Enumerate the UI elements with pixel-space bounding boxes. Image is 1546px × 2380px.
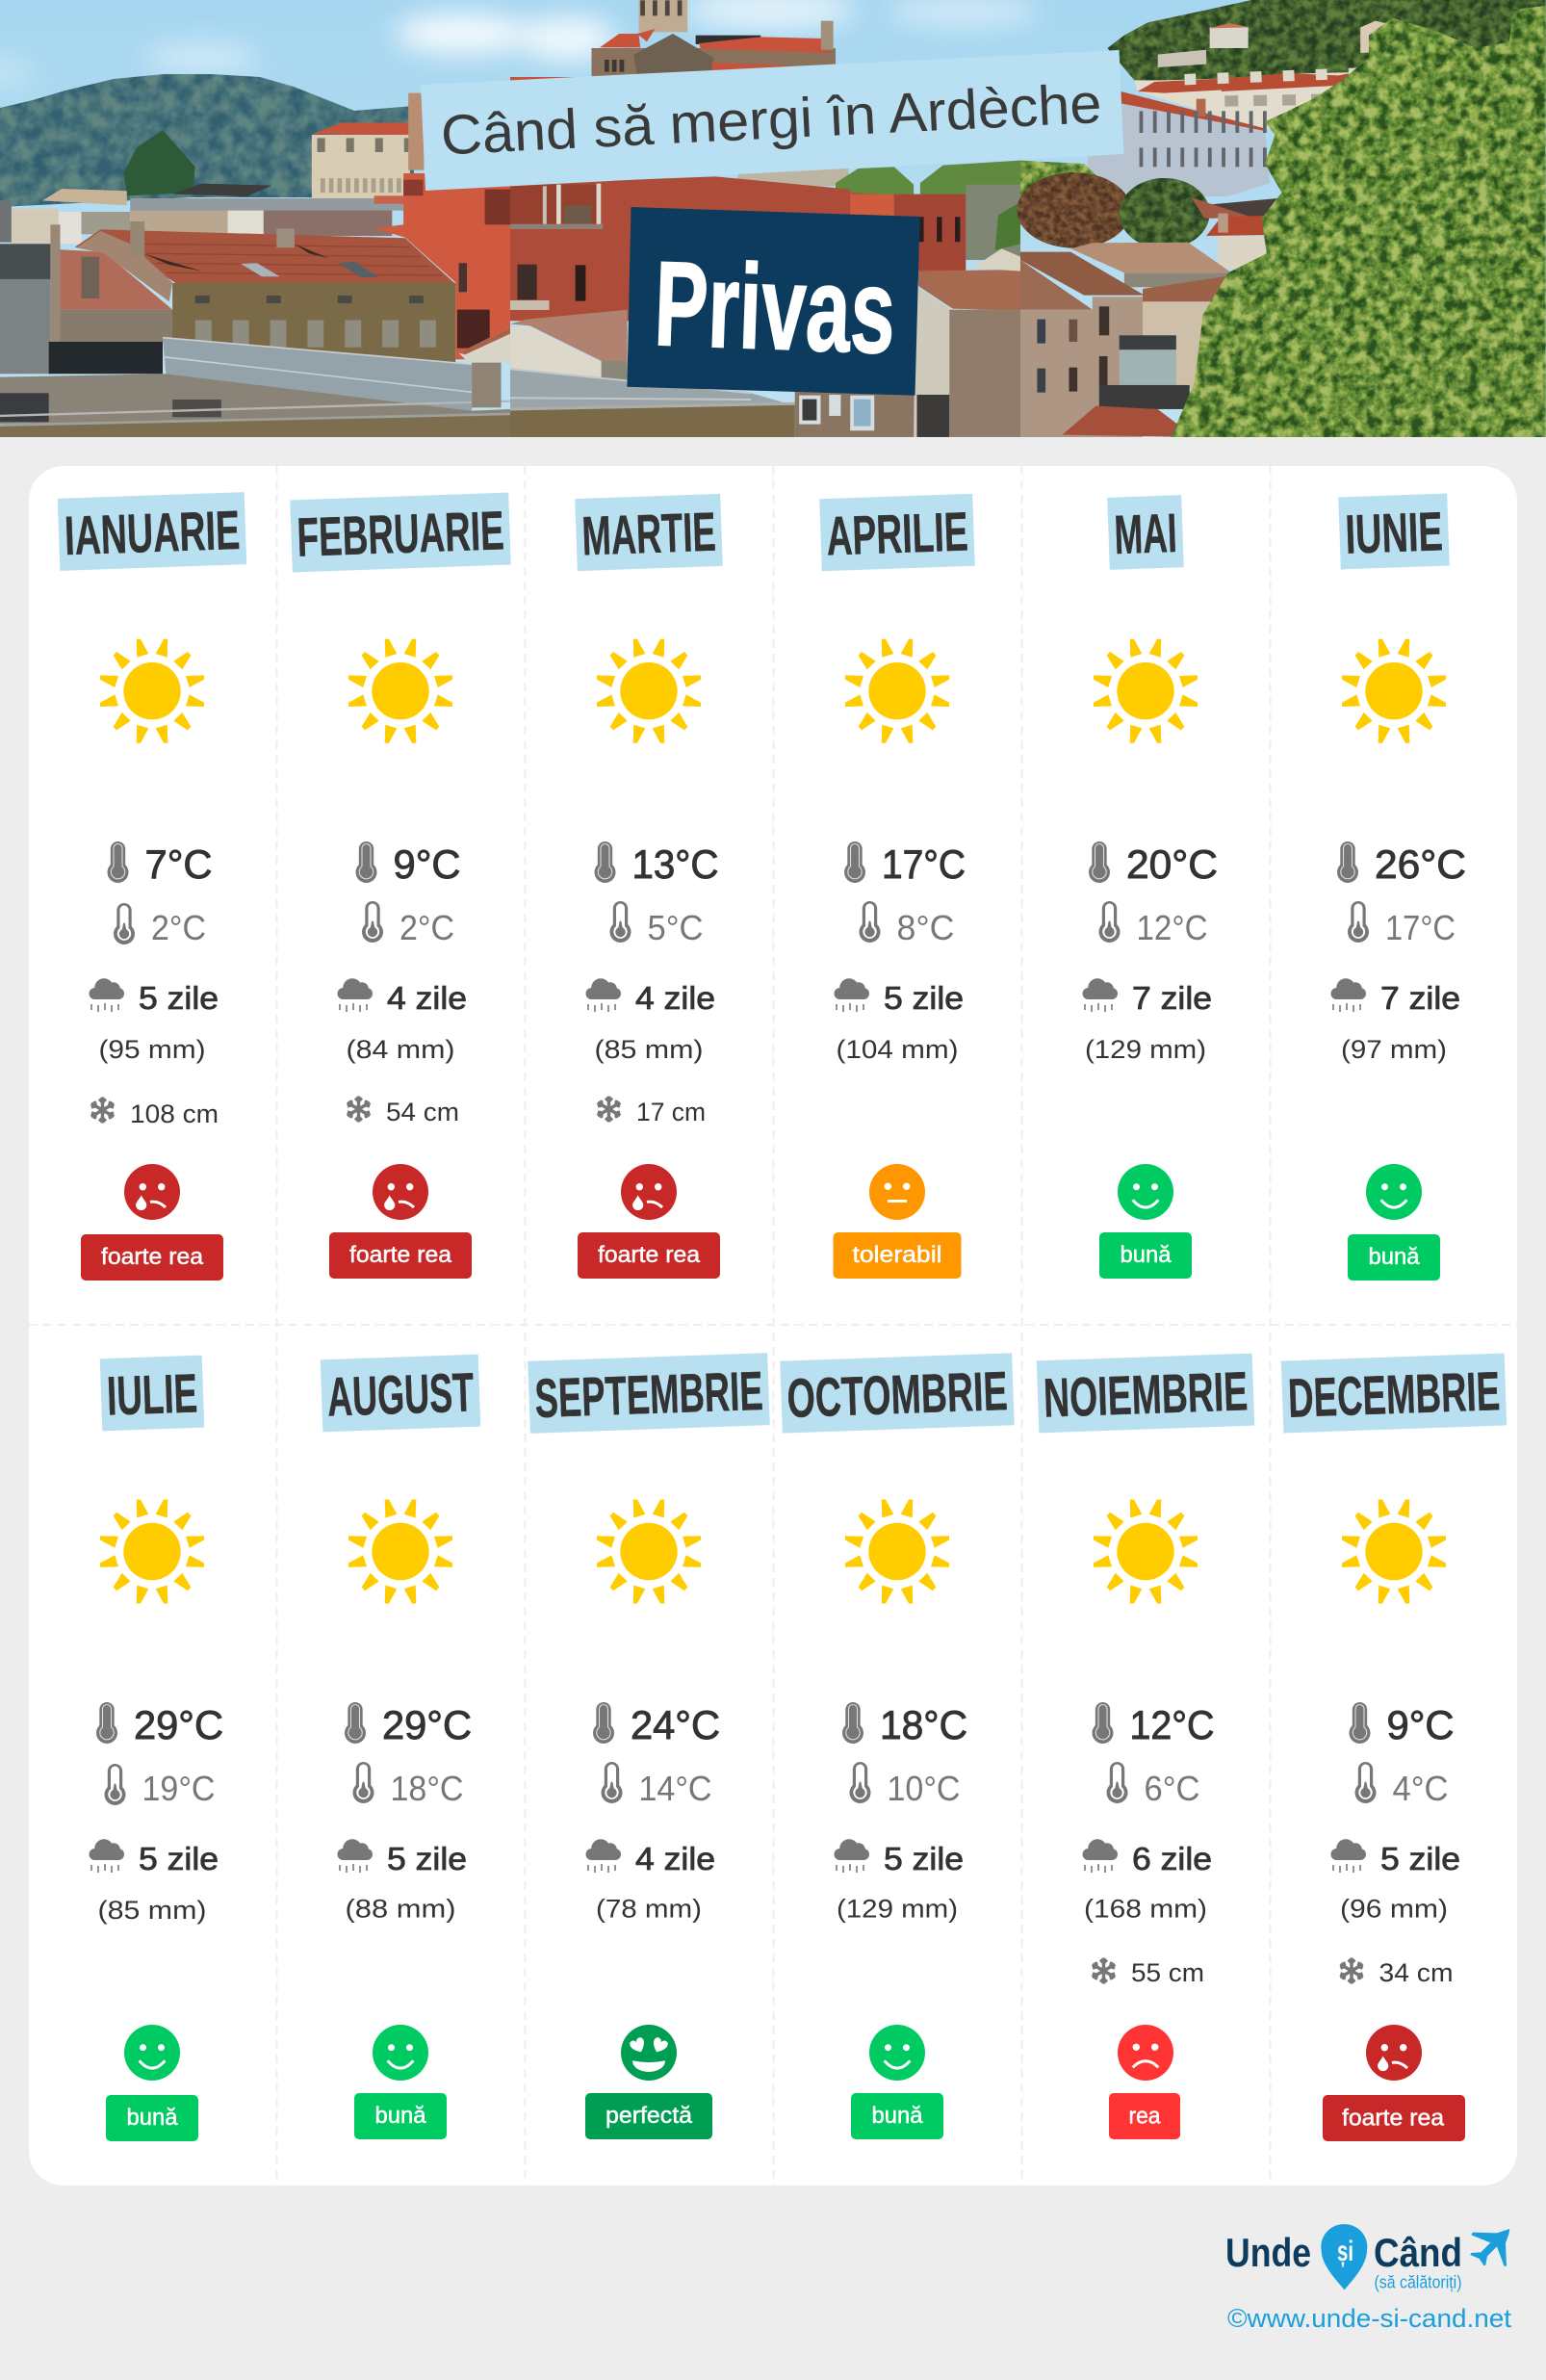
big chestnut tree: [1172, 6, 1546, 437]
min temperature: 2°C: [399, 908, 454, 947]
month heading: [58, 492, 246, 571]
logo: Unde și Când: [1225, 2224, 1509, 2292]
rating badge: [585, 2093, 712, 2139]
max temperature: [108, 841, 212, 887]
min temperature: [601, 1762, 712, 1808]
max temperature: 9°C: [393, 841, 460, 887]
rating badge: bună: [1121, 1242, 1172, 1268]
rainfall: (85 mm): [98, 1896, 206, 1925]
left district buildings: [0, 93, 510, 437]
month heading: [528, 1353, 770, 1434]
min temperature: 19°C: [142, 1769, 216, 1808]
icon: sun: [100, 1500, 204, 1604]
min temperature: 10°C: [888, 1769, 961, 1808]
min temperature: 4°C: [1392, 1769, 1448, 1808]
panel: Mai: [1082, 495, 1218, 1279]
rainy days: 4 zile: [387, 980, 467, 1016]
icon: crying face: [1366, 2025, 1422, 2081]
rating badge: [578, 1232, 720, 1279]
icon: crying face: [621, 1164, 677, 1220]
icon: sun: [597, 639, 701, 743]
month heading: [819, 494, 975, 571]
rating badge: foarte rea: [349, 1242, 452, 1268]
panel: Noiembrie: [1037, 1354, 1254, 2139]
church and central red building: [510, 0, 1020, 437]
max temperature: 17°C: [882, 841, 966, 887]
rating badge: tolerabil: [853, 1242, 941, 1268]
rainy days: [1330, 1839, 1460, 1876]
month heading: AUGUST: [326, 1361, 475, 1429]
min temperature: [1107, 1762, 1199, 1808]
snowfall: 34 cm: [1379, 1958, 1454, 1987]
max temperature: 20°C: [1126, 841, 1218, 887]
month heading: [321, 1355, 480, 1432]
logo: Unde și Când: (să călătoriți): [1375, 2273, 1461, 2292]
icon: sun: [845, 639, 949, 743]
min temperature: [362, 901, 454, 947]
icon: sun: [100, 639, 204, 743]
icon: sad face: [1118, 2025, 1173, 2081]
min temperature: 5°C: [647, 908, 703, 947]
rainy days: 4 zile: [635, 1841, 715, 1876]
rainy days: [1330, 978, 1460, 1016]
min temperature: [352, 1762, 464, 1808]
icon: sun: [1094, 639, 1198, 743]
icon: smiling face: [1118, 1164, 1173, 1220]
month heading: MAI: [1113, 503, 1178, 566]
rainy days: [834, 978, 964, 1016]
month heading: [575, 494, 723, 571]
panel: Martie: [575, 494, 723, 1279]
rating badge: foarte rea: [598, 1242, 701, 1268]
max temperature: 7°C: [144, 841, 212, 887]
max temperature: [842, 1702, 967, 1747]
month heading: [1338, 494, 1450, 569]
title banner: Când să mergi în Ardèche: [439, 72, 1103, 167]
rainy days: [1082, 1839, 1212, 1876]
rainy days: [585, 978, 715, 1016]
min temperature: [104, 1764, 216, 1808]
rainy days: 7 zile: [1380, 980, 1460, 1016]
rainfall: (96 mm): [1340, 1895, 1448, 1924]
panel: August: [321, 1355, 480, 2139]
min temperature: 12°C: [1136, 908, 1207, 947]
snowfall: [598, 1096, 706, 1126]
rating badge: [81, 1234, 223, 1281]
icon: plane: [1470, 2229, 1509, 2266]
min temperature: 6°C: [1144, 1769, 1199, 1808]
rating badge: [1323, 2095, 1465, 2141]
min temperature: [849, 1762, 961, 1808]
min temperature: [114, 903, 206, 947]
rainy days: [834, 1839, 964, 1876]
icon: crying face: [124, 1164, 180, 1220]
min temperature: [610, 901, 703, 947]
rainy days: 5 zile: [884, 980, 964, 1016]
panel: Aprilie: [819, 494, 975, 1279]
rainy days: 5 zile: [884, 1841, 964, 1876]
snowfall: 54 cm: [386, 1098, 459, 1126]
rating badge: bună: [1369, 1244, 1420, 1270]
max temperature: 24°C: [631, 1702, 720, 1747]
rainy days: 4 zile: [635, 980, 715, 1016]
rainy days: [89, 1839, 219, 1876]
max temperature: 12°C: [1130, 1702, 1215, 1747]
month heading: APRILIE: [825, 501, 969, 568]
min temperature: 14°C: [639, 1769, 712, 1808]
rainfall: (129 mm): [837, 1895, 958, 1924]
rating badge: bună: [127, 2105, 178, 2131]
rating badge: [329, 1232, 472, 1279]
month heading: OCTOMBRIE: [786, 1360, 1009, 1430]
rating badge: foarte rea: [101, 1244, 204, 1270]
month heading: IULIE: [106, 1362, 198, 1428]
icon: sun: [597, 1500, 701, 1604]
rainfall: (129 mm): [1085, 1035, 1206, 1064]
rainfall: (85 mm): [595, 1035, 703, 1064]
max temperature: [1092, 1702, 1215, 1747]
max temperature: [595, 841, 718, 887]
min temperature: 8°C: [897, 908, 955, 947]
rating badge: [851, 2093, 943, 2139]
icon: neutral face: [869, 1164, 925, 1220]
rainfall: (104 mm): [836, 1035, 959, 1064]
icon: sun: [348, 1500, 452, 1604]
max temperature: [356, 841, 460, 887]
title banner: [421, 50, 1124, 191]
rainy days: [89, 978, 219, 1016]
rainfall: (84 mm): [347, 1035, 454, 1064]
panel: Iulie: [89, 1356, 223, 2141]
city name banner: [627, 207, 920, 396]
logo: Unde și Când: Când: [1374, 2230, 1462, 2275]
rating badge: [834, 1232, 961, 1279]
rating badge: [1109, 2093, 1180, 2139]
rainy days: 5 zile: [1380, 1841, 1460, 1876]
max temperature: 13°C: [631, 841, 718, 887]
month heading: [100, 1356, 204, 1431]
rainfall: (168 mm): [1084, 1895, 1207, 1924]
max temperature: 29°C: [134, 1702, 223, 1747]
snowfall: 55 cm: [1131, 1958, 1204, 1987]
rating badge: perfectă: [606, 2103, 693, 2129]
snowfall: 17 cm: [636, 1098, 706, 1126]
mountain: [0, 74, 414, 207]
month heading: [290, 493, 511, 572]
icon: heart-eyes face: [621, 2025, 677, 2081]
min temperature: 18°C: [391, 1769, 464, 1808]
panel: Decembrie: [1281, 1353, 1507, 2141]
rating badge: [1348, 1234, 1440, 1281]
rainfall: (95 mm): [98, 1035, 206, 1064]
logo: Unde și Când: și: [1337, 2236, 1353, 2267]
snowfall: [91, 1098, 219, 1128]
min temperature: 2°C: [151, 908, 206, 947]
rainfall: (78 mm): [596, 1895, 702, 1924]
month heading: SEPTEMBRIE: [534, 1360, 764, 1430]
snowfall: [1093, 1958, 1204, 1987]
rainy days: 5 zile: [139, 1841, 219, 1876]
city name banner: Privas: [653, 237, 897, 379]
icon: smiling face: [124, 2025, 180, 2081]
rainfall: (97 mm): [1341, 1035, 1447, 1064]
panel: Septembrie: [528, 1353, 770, 2139]
white card: [29, 466, 1517, 2186]
snowfall: [348, 1096, 459, 1126]
panel: Iunie: [1330, 494, 1466, 1281]
rating badge: [106, 2095, 198, 2141]
website credit: ©www.unde-si-cand.net: [1227, 2304, 1512, 2333]
rainfall: (88 mm): [345, 1895, 456, 1924]
rainy days: [585, 1839, 715, 1876]
sky: [0, 0, 1546, 437]
max temperature: 29°C: [382, 1702, 472, 1747]
snowfall: [1340, 1958, 1454, 1987]
panel: Octombrie: [780, 1353, 1015, 2139]
icon: sun: [1094, 1500, 1198, 1604]
month heading: FEBRUARIE: [296, 500, 505, 569]
max temperature: 26°C: [1375, 841, 1466, 887]
rainy days: 5 zile: [139, 980, 219, 1016]
panel: Februarie: [290, 493, 511, 1279]
icon: sun: [1342, 639, 1446, 743]
snowfall: 108 cm: [130, 1099, 219, 1128]
rainy days: 5 zile: [387, 1841, 467, 1876]
rainy days: 6 zile: [1132, 1841, 1212, 1876]
hero photo of Privas: [0, 0, 1546, 437]
min temperature: [1348, 901, 1456, 947]
rating badge: [1099, 1232, 1192, 1279]
min temperature: [1355, 1762, 1448, 1808]
rainy days: [337, 1839, 467, 1876]
month heading: NOIEMBRIE: [1043, 1360, 1249, 1430]
month heading: [1037, 1354, 1254, 1433]
icon: sun: [1342, 1500, 1446, 1604]
rainy days: 7 zile: [1132, 980, 1212, 1016]
icon: smiling face: [1366, 1164, 1422, 1220]
icon: sun: [348, 639, 452, 743]
month heading: IUNIE: [1344, 501, 1444, 566]
month heading: MARTIE: [580, 502, 717, 567]
rainy days: [1082, 978, 1212, 1016]
rating badge: [354, 2093, 447, 2139]
min temperature: [859, 901, 955, 947]
icon: map pin: [1321, 2224, 1367, 2289]
icon: sun: [845, 1500, 949, 1604]
max temperature: [1350, 1702, 1454, 1747]
clouds: [0, 0, 1040, 84]
month heading: [780, 1353, 1015, 1434]
icon: crying face: [373, 1164, 428, 1220]
rating badge: rea: [1128, 2103, 1161, 2130]
rainy days: [337, 978, 467, 1016]
hillside and right district buildings: [1018, 0, 1546, 437]
max temperature: [844, 841, 966, 887]
panel: Ianuarie: [58, 492, 246, 1281]
icon: smiling face: [869, 2025, 925, 2081]
icon: smiling face: [373, 2025, 428, 2081]
rating badge: bună: [375, 2103, 426, 2129]
min temperature: [1099, 901, 1207, 947]
max temperature: 18°C: [880, 1702, 967, 1747]
rating badge: bună: [872, 2103, 923, 2129]
min temperature: 17°C: [1385, 908, 1456, 947]
month heading: [1107, 495, 1184, 570]
logo: Unde și Când: Unde: [1225, 2230, 1311, 2275]
rating badge: foarte rea: [1342, 2105, 1445, 2132]
month heading: IANUARIE: [64, 500, 241, 567]
max temperature: 9°C: [1386, 1702, 1454, 1747]
